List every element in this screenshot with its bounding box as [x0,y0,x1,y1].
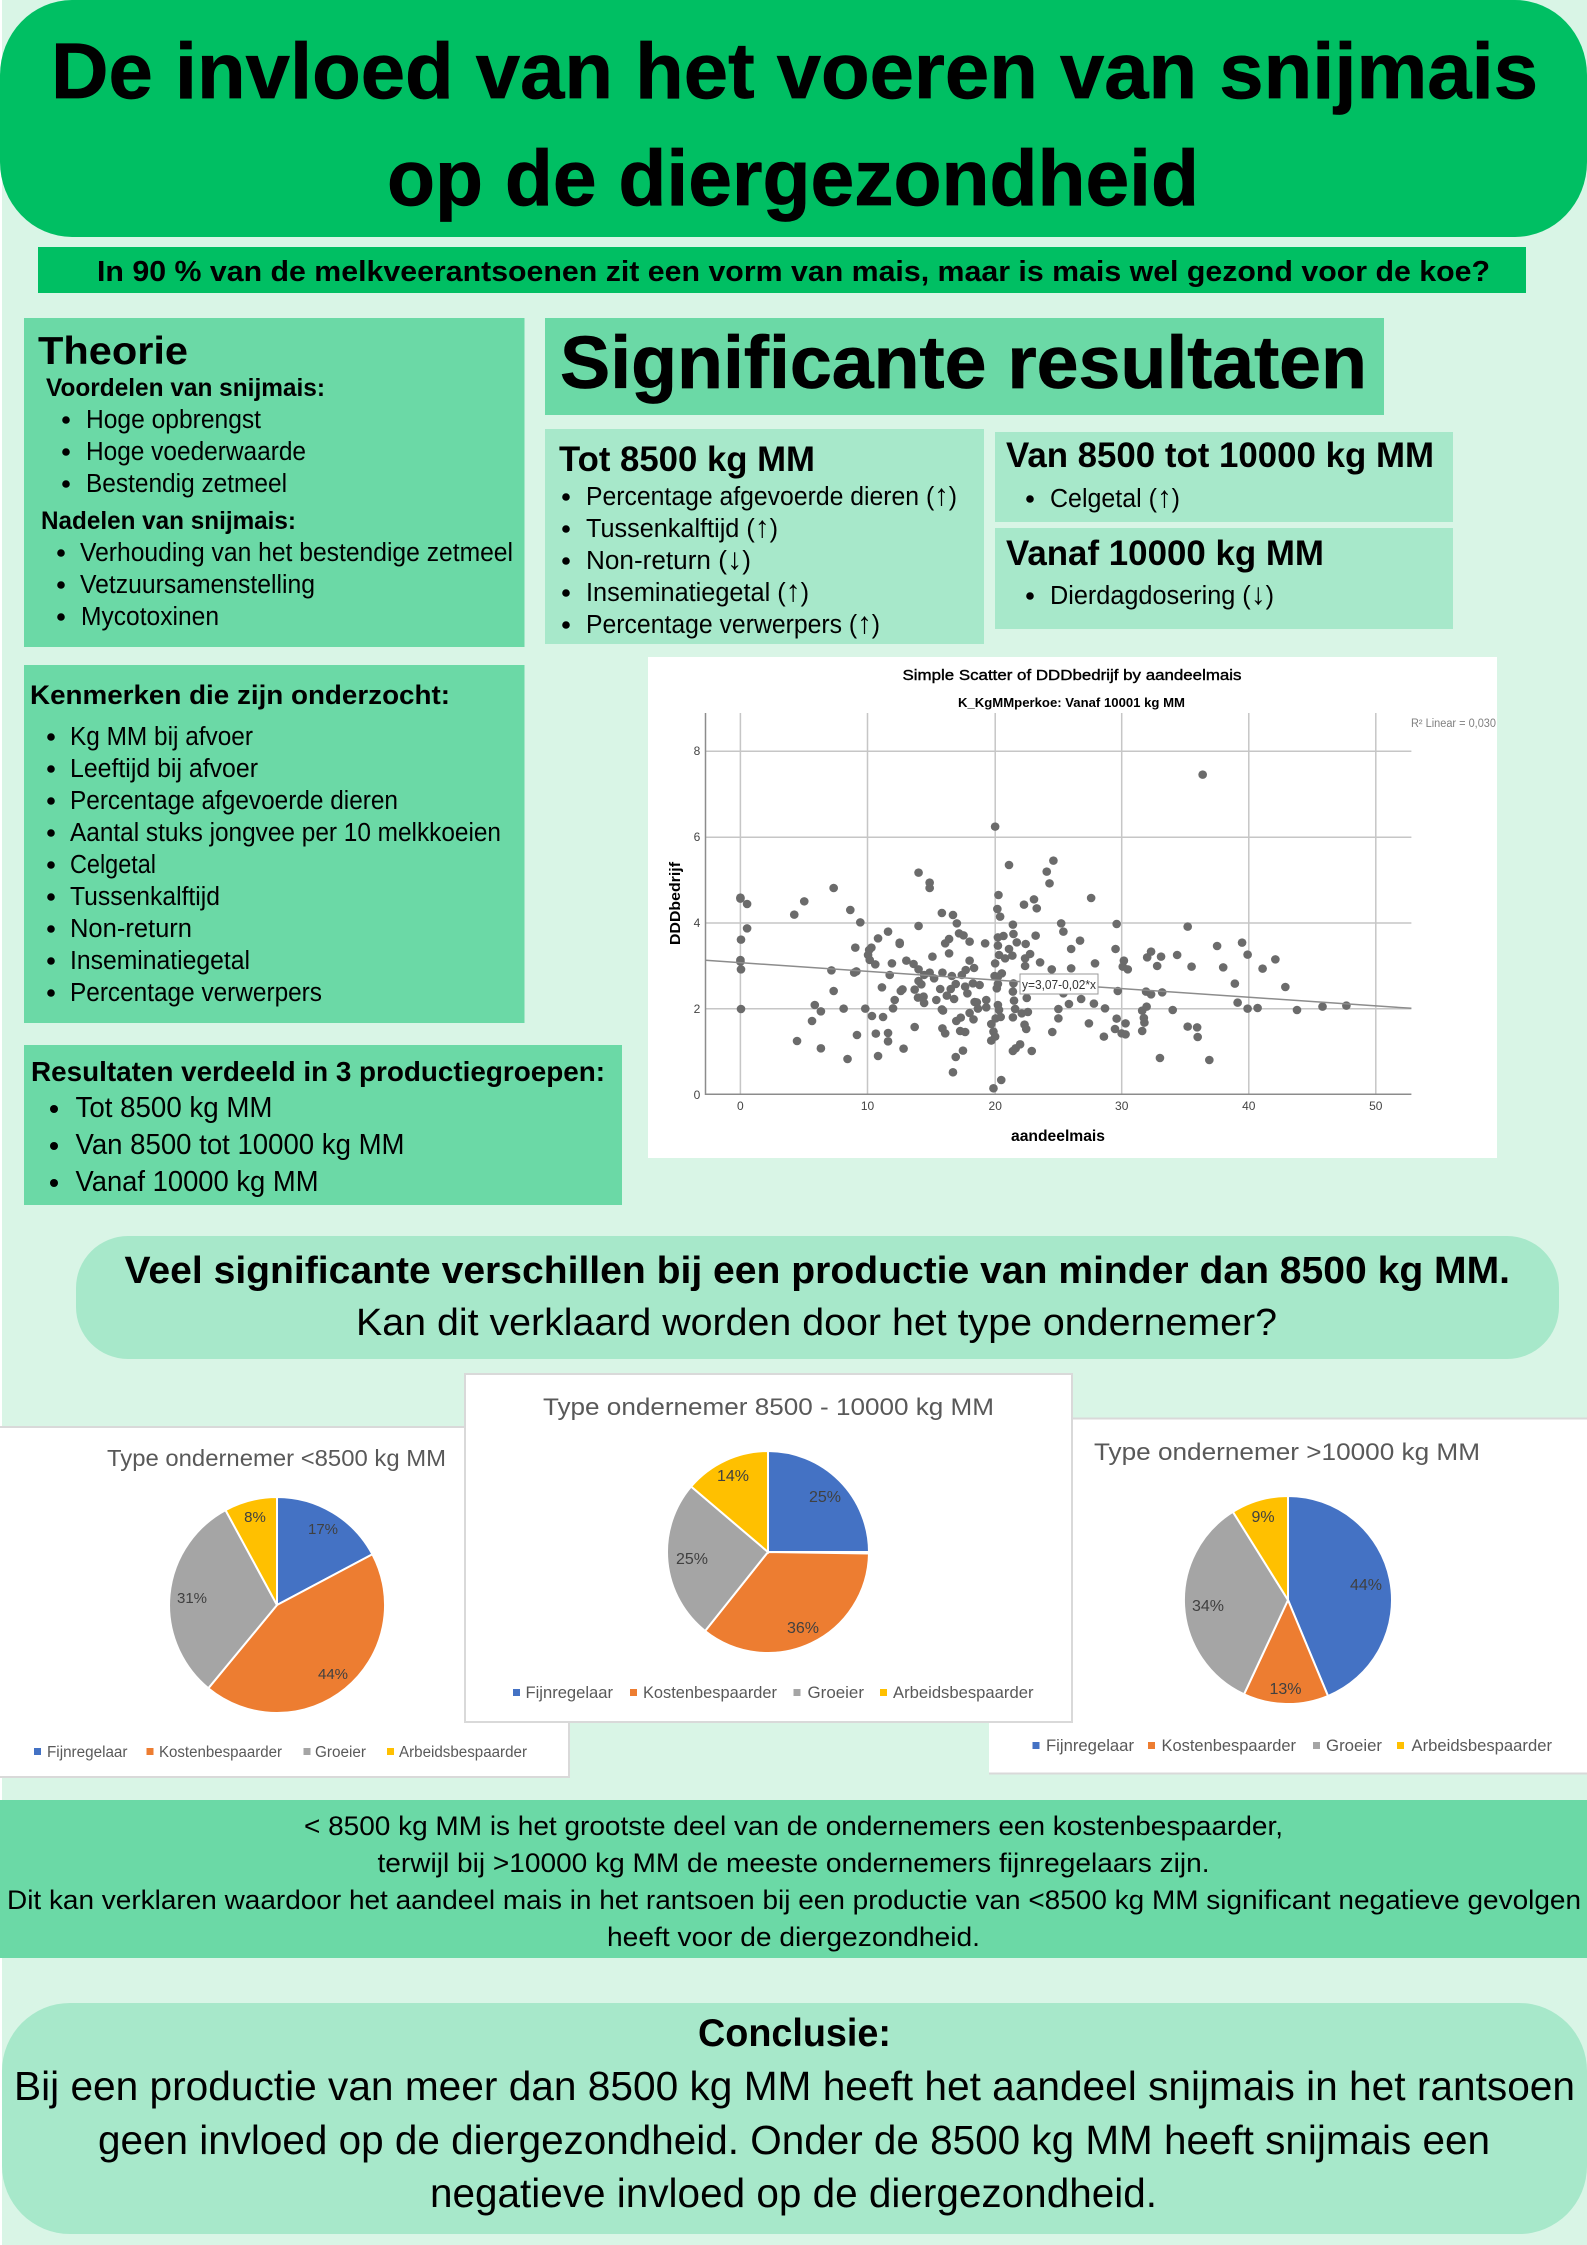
panel: conclusie [2,2003,1587,2234]
y axis label: DDDbedrijf [667,861,684,945]
panel: kenmerken die zijn onderzocht: Kg MM bij afvoer [70,723,253,751]
explanation band: terwijl bij >10000 kg MM de meeste ondernemers fijnregelaars zijn. [378,1848,1210,1878]
list: nadelen: Nadelen van snijmais: [41,507,296,535]
panel: kenmerken die zijn onderzocht: Celgetal [70,851,156,879]
chart: pie type ondernemer 8500 - 10000: Type ondernemer 8500 - 10000 kg MM [543,1394,994,1421]
callout: veel significante verschillen: Kan dit verklaard worden door het type ondernemer? [356,1302,1277,1344]
panel: vanaf 10000 kg MM: Vanaf 10000 kg MM [1006,534,1324,573]
subtitle question bar [38,247,1526,293]
panel: kenmerken die zijn onderzocht [24,665,524,1023]
tick labels: 0 [694,1088,701,1102]
panel: resultaten verdeeld in 3 productiegroepen: Vanaf 10000 kg MM [76,1166,318,1198]
legend: Fijnregelaar [47,1744,128,1761]
chart: pie type ondernemer kleiner dan 8500: Type ondernemer <8500 kg MM [107,1445,446,1471]
tick labels: 40 [1242,1099,1256,1113]
chart: pie type ondernemer 8500 - 10000: 25% [676,1551,708,1568]
tick labels: 20 [989,1099,1002,1113]
tick labels [694,744,1383,1113]
panel: vanaf 10000 kg MM: Dierdagdosering (↓) [1050,578,1274,611]
legend [513,1683,1034,1702]
explanation band [0,1800,1587,1958]
panel: kenmerken die zijn onderzocht: Tussenkalftijd [70,883,220,911]
callout: veel significante verschillen [76,1236,1559,1359]
panel: resultaten verdeeld in 3 productiegroepen: Van 8500 tot 10000 kg MM [76,1129,404,1161]
panel: vanaf 10000 kg MM [995,528,1453,629]
conclusie text [14,2063,1575,2216]
legend: Fijnregelaar [526,1683,613,1702]
chart titles [902,667,1242,710]
chart: pie type ondernemer groter dan 10000: 13% [1269,1681,1302,1698]
list: nadelen [41,507,513,631]
panel: kenmerken die zijn onderzocht: Percentage verwerpers [70,979,322,1007]
chart: pie type ondernemer groter dan 10000 [989,1418,1587,1774]
legend: Kostenbespaarder [643,1683,777,1702]
chart: scatter plot DDDbedrijf by aandeelmais [648,657,1497,1158]
conclusie text: geen invloed op de diergezondheid. Onder de 8500 kg MM heeft snijmais een [98,2117,1490,2163]
legend: Groeier [808,1683,864,1702]
chart: pie type ondernemer 8500 - 10000: 36% [787,1620,819,1637]
panel: theorie [24,318,524,647]
list: nadelen: Mycotoxinen [81,603,219,631]
panel: tot 8500 kg MM [545,429,984,644]
chart titles: K_KgMMperkoe: Vanaf 10001 kg MM [958,696,1185,710]
callout: veel significante verschillen: Veel significante verschillen bij een productie van minder dan 8500 kg MM. [124,1250,1510,1292]
tick labels: 50 [1369,1099,1383,1113]
panel: van 8500 tot 10000 kg MM [995,432,1453,522]
data points [736,770,1351,1093]
heading: theorie: Theorie [38,330,188,373]
title banner: op de diergezondheid [387,133,1199,222]
tick labels: 0 [737,1099,744,1113]
panel: kenmerken die zijn onderzocht: Kenmerken die zijn onderzocht: [30,680,450,710]
chart: pie type ondernemer groter dan 10000: Type ondernemer >10000 kg MM [1094,1439,1480,1466]
legend: Arbeidsbespaarder [1412,1736,1552,1755]
tick labels: 8 [694,744,701,758]
panel: kenmerken die zijn onderzocht: Non-return [70,915,192,943]
chart: pie type ondernemer groter dan 10000: 9% [1251,1509,1275,1526]
chart: pie type ondernemer kleiner dan 8500: 44% [318,1666,348,1683]
panel: kenmerken die zijn onderzocht: Inseminatiegetal [70,947,250,975]
legend: Groeier [1326,1736,1382,1755]
heading: significante resultaten: Significante resultaten [560,321,1367,404]
chart titles: Simple Scatter of DDDbedrijf by aandeelmais [902,667,1242,684]
legend: Groeier [315,1744,366,1761]
panel: tot 8500 kg MM: Tussenkalftijd (↑) [586,511,778,544]
legend: Arbeidsbespaarder [893,1683,1034,1702]
conclusie heading: Conclusie: [698,2012,891,2055]
list: voordelen [46,374,325,498]
conclusie text: negatieve invloed op de diergezondheid. [430,2170,1157,2216]
chart: pie type ondernemer kleiner dan 8500: 31% [177,1590,207,1607]
x axis label: aandeelmais [1011,1128,1105,1145]
panel: tot 8500 kg MM: Percentage verwerpers (↑) [586,607,880,640]
legend: Kostenbespaarder [1162,1736,1296,1755]
panel: tot 8500 kg MM: Inseminatiegetal (↑) [586,575,809,608]
tick labels: 4 [694,916,701,930]
panel: kenmerken die zijn onderzocht: Percentage afgevoerde dieren [70,787,398,815]
explanation band: < 8500 kg MM is het grootste deel van de ondernemers een kostenbespaarder, [304,1811,1283,1841]
panel: kenmerken die zijn onderzocht: Leeftijd bij afvoer [70,755,258,783]
list: voordelen: Voordelen van snijmais: [46,374,325,402]
list: nadelen: Vetzuursamenstelling [80,571,315,599]
panel: van 8500 tot 10000 kg MM: Van 8500 tot 10000 kg MM [1006,436,1434,475]
tick labels: 2 [694,1002,701,1016]
legend: Arbeidsbespaarder [399,1744,527,1761]
panel: van 8500 tot 10000 kg MM: Celgetal (↑) [1050,481,1180,514]
tick labels: 30 [1115,1099,1129,1113]
list: voordelen: Hoge voederwaarde [86,438,306,466]
panel: tot 8500 kg MM: Non-return (↓) [586,543,751,576]
tick labels: 6 [694,830,701,844]
panel: resultaten verdeeld in 3 productiegroepen: Tot 8500 kg MM [76,1092,272,1124]
tick labels: 10 [861,1099,874,1113]
title banner: De invloed van het voeren van snijmais [51,26,1538,115]
chart: pie type ondernemer kleiner dan 8500 [0,1427,569,1777]
explanation band: heeft voor de diergezondheid. [607,1922,980,1952]
subtitle question bar: In 90 % van de melkveerantsoenen zit een vorm van mais, maar is mais wel gezond voor de koe? [97,256,1490,288]
explanation band: Dit kan verklaren waardoor het aandeel mais in het rantsoen bij een productie van <8500 kg MM significant negatieve gevolgen [7,1885,1581,1915]
chart: pie type ondernemer kleiner dan 8500: 8% [244,1509,266,1526]
title banner [0,0,1587,237]
chart: pie type ondernemer 8500 - 10000 [465,1374,1072,1722]
r-squared label: R² Linear = 0,030 [1411,718,1496,730]
legend: Fijnregelaar [1046,1736,1134,1755]
legend [1032,1736,1552,1755]
chart: pie type ondernemer groter dan 10000: 34% [1192,1598,1224,1615]
conclusie text: Bij een productie van meer dan 8500 kg MM heeft het aandeel snijmais in het rantsoen [14,2063,1575,2109]
panel: tot 8500 kg MM: Percentage afgevoerde dieren (↑) [586,479,957,512]
legend [34,1744,527,1761]
panel: kenmerken die zijn onderzocht: Aantal stuks jongvee per 10 melkkoeien [70,819,501,847]
list: voordelen: Hoge opbrengst [86,406,261,434]
panel: resultaten verdeeld in 3 productiegroepen [24,1045,622,1205]
chart: pie type ondernemer 8500 - 10000: 25% [809,1489,841,1506]
chart: pie type ondernemer 8500 - 10000: 14% [717,1468,749,1485]
panel: resultaten verdeeld in 3 productiegroepen: Resultaten verdeeld in 3 productiegroepen: [31,1056,605,1087]
list: voordelen: Bestendig zetmeel [86,470,287,498]
regression equation label: y=3,07-0,02*x [1022,978,1097,992]
chart: pie type ondernemer groter dan 10000: 44% [1350,1577,1382,1594]
legend: Kostenbespaarder [159,1744,282,1761]
list: nadelen: Verhouding van het bestendige zetmeel [80,539,513,567]
regression equation label [1020,974,1098,994]
chart: pie type ondernemer kleiner dan 8500: 17% [308,1521,338,1538]
panel: tot 8500 kg MM: Tot 8500 kg MM [559,440,815,479]
